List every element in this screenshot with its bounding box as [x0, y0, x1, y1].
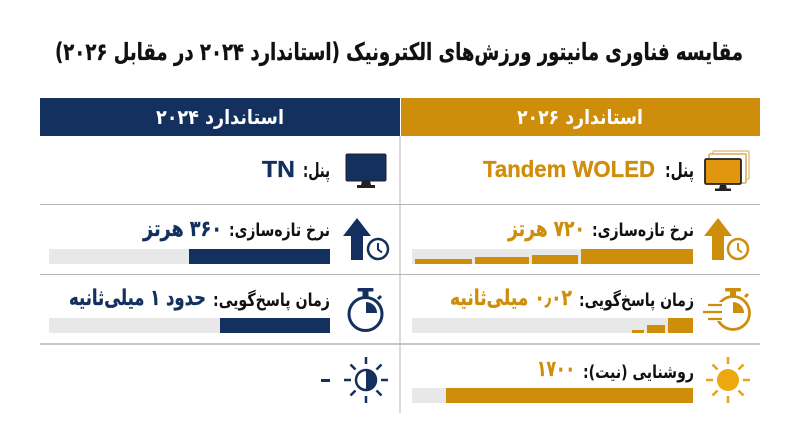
- panel value: Tandem WOLED: [483, 156, 655, 182]
- header: standard 2024: استاندارد ۲۰۲۴: [156, 105, 284, 129]
- bar chart: refresh rate: [412, 249, 693, 264]
- response value: حدود ۱ میلی‌ثانیه: [69, 286, 206, 311]
- icon: fast stopwatch: [700, 288, 750, 330]
- bar chart: response time: [49, 318, 330, 333]
- icon: arrow and clock: [704, 218, 748, 260]
- refresh value: ۷۲۰ هرتز: [507, 217, 585, 242]
- panel: 2026 brightness row: [412, 357, 750, 403]
- bar chart: response time: [412, 318, 693, 333]
- brightness value: none: [321, 379, 330, 382]
- panel: 2026 response time row: [412, 286, 750, 333]
- brightness label: روشنایی (نیت):: [583, 362, 694, 383]
- panel: 2026 panel type row: [483, 151, 749, 191]
- panel: 2024 response time row: [49, 286, 382, 333]
- icon: arrow and clock: [343, 218, 388, 260]
- brightness value: ۱۷۰۰: [537, 357, 575, 382]
- header: standard 2026: استاندارد ۲۰۲۶: [517, 105, 643, 129]
- panel: 2024 panel type row: [262, 154, 386, 188]
- panel label: پنل:: [303, 158, 330, 183]
- bar chart: refresh rate: [49, 249, 330, 264]
- response value: ۰٫۰۲ میلی‌ثانیه: [450, 286, 572, 311]
- header: standard 2024: [40, 98, 400, 136]
- response label: زمان پاسخ‌گویی:: [579, 289, 694, 311]
- refresh label: نرخ تازه‌سازی:: [229, 220, 330, 241]
- icon: monitor: [346, 154, 386, 188]
- panel value: TN: [262, 156, 295, 182]
- icon: stopwatch: [349, 288, 382, 330]
- response label: زمان پاسخ‌گویی:: [213, 289, 330, 311]
- icon: sun: [706, 357, 750, 403]
- panel: 2024 brightness row: [321, 357, 388, 403]
- panel: 2024 refresh rate row: [49, 217, 388, 264]
- icon: stacked monitors: [705, 151, 749, 191]
- panel: 2026 refresh rate row: [412, 217, 748, 264]
- panel label: پنل:: [665, 158, 694, 183]
- refresh label: نرخ تازه‌سازی:: [592, 220, 694, 241]
- header: standard 2026: [401, 98, 760, 136]
- refresh value: ۳۶۰ هرتز: [142, 217, 222, 242]
- bar chart: brightness: [412, 388, 693, 403]
- icon: half sun: [344, 357, 388, 403]
